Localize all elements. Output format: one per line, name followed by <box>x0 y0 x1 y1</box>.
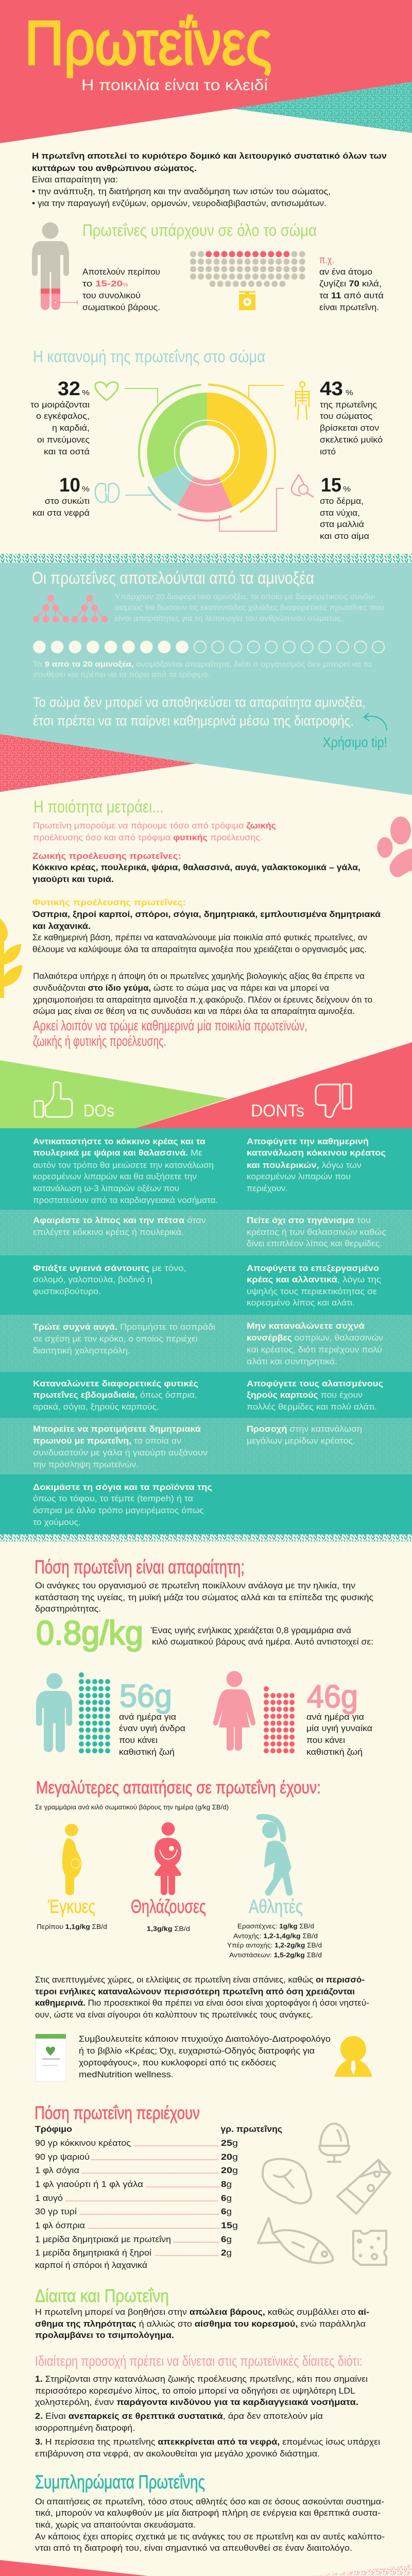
text: adult requirement: Ένας υγιής ενήλικας χρειάζεται 0,8 γραμμάρια ανά <box>150 1625 351 1635</box>
icon: nursing woman <box>154 1822 181 1895</box>
text: diet and protein: σθημα της πληρότητας ή αλλιώς στο αίσθημα του κορεσμού, ενώ παράλληλα <box>35 2319 366 2329</box>
stat: 15 percent: στα νύχια, <box>320 508 360 518</box>
text: advice: medNutrition wellness. <box>79 2070 174 2079</box>
tip rows: donts: κρέας και αλλαντικά , λόγω της <box>247 1275 381 1284</box>
tip rows: donts: και πουλερικών, λόγω των <box>247 1160 362 1170</box>
table: protein content: 6g <box>221 2207 232 2216</box>
text: essential amino acids: συνθέσει και πρέπει να τα πάρει από τα τρόφιμα. <box>33 670 210 679</box>
heading: how much protein: Πόση πρωτεΐνη είναι απαραίτητη; <box>35 1556 245 1578</box>
text: supplements: Αν κάποιος έχει απορίες σχετικά με τις ανάγκες του σε πρωτεΐνη και αν αυτές καλύπτο- <box>35 2532 385 2541</box>
stat: 15 percent: στα μαλλιά <box>320 519 364 529</box>
text: diet and protein: Η πρωτεΐνη μπορεί να βοηθήσει στην απώλεια βάρους, καθώς συμβάλλει στο αί- <box>35 2307 369 2317</box>
text: 20 amino acids: ασμούς θα δώσουν τις εκατοντάδες χιλιάδες διαφορετικές πρωτεΐνες που <box>115 603 384 612</box>
values: requirements: Ερασιτέχνες: 1g/kg ΣΒ/d <box>237 1922 314 1930</box>
text: healthy woman: μία υγιή γυναίκα <box>306 1723 372 1733</box>
stat: 10 percent: και στα νεφρά <box>32 508 90 518</box>
text: combining proteins: συνδυάζονται στο ίδιο γεύμα, ώστε το σώμα μας να πάρει και να μπορεί να <box>33 983 329 993</box>
tip rows: dos: όσπρια με άλλο τρόπο μαγειρέματος όπως <box>33 1505 204 1515</box>
stat: 43 percent: της πρωτεΐνης <box>320 400 377 410</box>
icon: man <box>36 1673 72 1752</box>
text: body share: του συνολικού <box>82 291 141 300</box>
text: protein sources: προέλευσης όσο και από τρόφιμα φυτικής προέλευσης. <box>33 833 263 842</box>
tip rows: donts: κορεσμένο λίπος και αλάτι. <box>247 1298 355 1308</box>
tip rows: dos: αρακά, σόγια, ξηρούς καρπούς. <box>33 1402 159 1412</box>
heading: supplements: Συμπληρώματα Πρωτεΐνης <box>35 2471 205 2493</box>
tip rows: donts <box>247 1137 386 1446</box>
heading: quality: Η ποιότητα μετράει... <box>33 797 164 816</box>
tip rows: dos: Δοκιμάστε τη σόγια και τα προϊόντα της <box>33 1482 212 1492</box>
tip rows: dos: πουλερικά με ψάρια και θαλασσινά. Με <box>33 1148 202 1158</box>
panel: amino acids <box>0 554 412 795</box>
table: protein content: 1 μερίδα δημητριακά ή ξηροί <box>35 2248 151 2258</box>
intro text <box>32 151 387 208</box>
table: protein content: 20g <box>221 2152 238 2162</box>
stat: 15 percent <box>320 474 369 541</box>
table: protein content: 1 φλ σόγια <box>35 2165 79 2175</box>
callout: variety <box>33 1018 307 1049</box>
stat: 43 percent: βρίσκεται στον <box>320 423 379 433</box>
subtitle: Η ποικιλία είναι το κλειδί <box>81 77 268 94</box>
stat: 43 percent: του σώματος <box>320 411 372 421</box>
table: protein content: 1 μερίδα δημητριακά με πρωτεΐνη <box>35 2234 171 2244</box>
text: animal proteins: γιαούρτι και τυριά. <box>32 874 114 884</box>
icon: book <box>36 2034 66 2081</box>
dot grid: 46 g <box>264 1686 295 1753</box>
callout: body cannot store: Το σώμα δεν μπορεί να αποθηκεύσει τα απαραίτητα αμινοξέα, <box>33 694 366 710</box>
text: plant proteins: και λαχανικά. <box>32 921 91 931</box>
text: protein needs: κατάσταση της υγείας, τη μυϊκή μάζα του σώματος αλλά και τα επίπεδα της φυσικής <box>35 1592 373 1602</box>
tip rows: donts: ξηρούς καρπούς που έχουν <box>247 1390 363 1400</box>
tip rows: dos: φυστικοβούτυρο. <box>33 1286 101 1296</box>
table: protein content: 8g <box>221 2179 232 2189</box>
stat: 43 percent: 43 <box>320 378 343 400</box>
icon: drop with magnifier <box>291 474 314 497</box>
text: essential amino acids <box>33 660 372 679</box>
table: protein content: 6g <box>221 2193 232 2203</box>
table: protein content: 90 γρ κόκκινου κρέατος <box>35 2138 131 2148</box>
text: example 70 kg: π.χ. <box>319 255 334 266</box>
text: combining proteins: χρησιμοποιήσει τα απαραίτητα αμινοξέα π.χ.φακόρυζο. Πλέον οι έρευνες δείχνουν ότι το <box>33 995 372 1005</box>
stat: 15 percent: % <box>343 485 351 494</box>
table: protein content: καρποί ή σπόροι ή λαχανικά <box>35 2260 147 2270</box>
tip rows: dos: όπως το τόφου, το τέμπε (tempeh) ή τα <box>33 1494 193 1503</box>
tip rows: donts: Αποφύγετε τους αλατισμένους <box>247 1379 383 1388</box>
table: protein content: 15g <box>221 2221 238 2230</box>
text: supplements: τικά, μπορούν να καλυφθούν με μία διατροφή πλήρη σε ενέργεια και θρεπτικά συστα- <box>35 2508 381 2518</box>
stat: 32 percent: 32 <box>58 378 80 400</box>
text: protein needs: Οι ανάγκες του οργανισμού σε πρωτεΐνη ποικίλλουν ανάλογα με την ηλικία, την <box>35 1581 355 1590</box>
tip rows: dos: σολομό, γαλοπούλα, βοδινό ή <box>33 1275 152 1284</box>
text: 20 amino acids: είναι απαραίτητες για τη λειτουργία του ανθρώπινου σώματος. <box>115 614 343 623</box>
title: Πρωτεΐνες <box>25 8 272 78</box>
stat: 32 percent: το μοιράζονται <box>30 400 90 410</box>
icon: amino acid trees <box>33 595 108 622</box>
icon: scale <box>239 291 255 310</box>
tip rows: dos: Τρώτε συχνά αυγά. Προτιμήστε το ασπράδι <box>33 1322 215 1332</box>
text: developed countries <box>35 1975 369 2020</box>
text: protein needs <box>35 1581 373 1614</box>
text: combining proteins: Παλαιότερα υπήρχε η άποψη ότι οι πρωτεΐνες χαμηλής βιολογικής αξίας θα έπρεπε να <box>33 971 365 981</box>
tip rows: donts: υψηλής τους περιεκτικότητας σε <box>247 1286 377 1296</box>
stat: 32 percent <box>30 378 90 456</box>
list: reasons: 2. Είναι ανεπαρκείς σε θρεπτικά συστατικά , άρα δεν αποτελούν μία <box>35 2411 323 2421</box>
tip rows: dos: διαιτητική χοληστερόλη. <box>33 1346 130 1355</box>
icon: cheese <box>353 2231 386 2265</box>
icon: heart <box>95 382 118 400</box>
tip rows: dos: Αντικαταστήστε το κόκκινο κρέας και τα <box>33 1137 206 1146</box>
text: example 70 kg: είναι πρωτεΐνη. <box>319 302 379 312</box>
text: plant proteins: Όσπρια, ξηροί καρποί, σπόροι, σόγια, δημητριακά, εμπλουτισμένα δημητριακά <box>32 909 381 919</box>
values: requirements: 1,3g/kg ΣΒ/d <box>147 1925 190 1933</box>
values: requirements: Αντιστάσεων: 1,5-2g/kg ΣΒ/d <box>229 1951 322 1959</box>
header banner <box>0 0 412 143</box>
text: adult requirement <box>150 1625 373 1647</box>
list: reasons: 3. Η περίσσεια της πρωτεΐνης απεκκρίνεται από τα νεφρά, επομένως ίσως υπάρχει <box>35 2437 380 2447</box>
values: requirements: Υπέρ αντοχής: 1,2-2g/kg ΣΒ/d <box>227 1941 322 1949</box>
tip rows: donts: δίνει επιπλέον λίπος και θερμίδες. <box>247 1239 382 1248</box>
donut chart: protein distribution <box>125 384 284 531</box>
text: supplements: νται από τη διατροφή του, είναι σημαντικό να απευθυνθεί σε έναν διαιτολόγο. <box>35 2543 352 2553</box>
tip rows: dos: την πρόσληψη πρωτεϊνών. <box>33 1460 139 1469</box>
big number: 46 g: 46g <box>307 1679 358 1715</box>
big number: 56 g: 56g <box>119 1679 172 1714</box>
dot grid: 56 g <box>79 1672 110 1753</box>
dot grid: 70 kg <box>190 251 305 287</box>
heading: distribution: Η κατανομή της πρωτεΐνης στο σώμα <box>33 347 265 366</box>
arrow: tip <box>364 713 387 731</box>
text: plant proteins <box>32 897 381 954</box>
label: nursing: Θηλάζουσες <box>131 1896 206 1917</box>
text: developed countries: τεροι ενήλικες καταναλώνουν περισσότερη πρωτεΐνη από όση χρειάζονται <box>35 1987 355 1996</box>
icon: milk carton <box>337 2160 390 2214</box>
stat: 32 percent: % <box>82 388 90 397</box>
icon: thumbs up <box>35 1082 72 1117</box>
stat: 10 percent <box>32 474 90 518</box>
table: protein content: Τρόφιμο <box>35 2124 72 2134</box>
text: animal proteins <box>32 851 360 884</box>
text: body share: το 15-20 % <box>82 279 128 289</box>
icon: fish <box>258 2218 333 2263</box>
text: supplements: τικά, χωρίς να απαιτούνται σκευάσματα. <box>35 2520 196 2530</box>
values: requirements <box>37 1922 322 1959</box>
tip rows: dos: συνδυαστούν με γάλα ή γιαούρτι αυξάνουν <box>33 1448 208 1458</box>
label: athletes: Αθλητές <box>249 1896 303 1917</box>
text: body share: σωματικού βάρους. <box>82 302 160 312</box>
text: plant proteins: Σε καθημερινή βάση, πρέπει να καταναλώνουμε μία ποικιλία από φυτικές πρωτεΐνες, αν <box>32 933 367 942</box>
text: healthy man: που κάνει <box>119 1735 158 1745</box>
stat: 10 percent: 10 <box>59 474 80 496</box>
tip rows: dos: Μπορείτε να προτιμήσετε δημητριακά <box>33 1424 201 1434</box>
text: body share: Αποτελούν περίπου <box>82 267 160 277</box>
text: diet and protein: προλαμβάνει το τσιμπολόγημα. <box>35 2330 174 2340</box>
icon: steak <box>263 2159 311 2204</box>
table: protein content: 90 γρ ψαριού <box>35 2152 90 2162</box>
icon: kidneys <box>95 483 119 502</box>
tip rows: donts: Αποφύγετε το επεξεργασμένο <box>247 1263 379 1273</box>
icons: protein foods <box>258 2124 390 2265</box>
text: combining proteins: σώμα μας είναι σε θέση να τις συνδυάσει και να πάρει όλα τα απαραίτητα αμινοξέα. <box>33 1006 355 1016</box>
stat: 32 percent: και τα οστά <box>44 447 90 456</box>
panel: dos and donts list <box>0 1128 412 1541</box>
tip rows: dos: πρωτεΐνες εβδομαδιαία, όπως όσπρια, <box>33 1390 197 1400</box>
list: reasons: επιβάρυνση στα νεφρά, αν ακολουθείται για μεγάλο χρονικό διάστημα. <box>35 2449 320 2459</box>
icon: woman <box>213 1671 255 1751</box>
tip rows: dos: Αφαιρέστε το λίπος και την πέτσα όταν <box>33 1215 206 1225</box>
callout: variety: ζωικής ή φυτικής προέλευσης. <box>33 1033 166 1049</box>
tip rows: dos: προστατεύουν από τα καρδιαγγειακά νοσήματα. <box>33 1195 218 1205</box>
callout: body cannot store <box>33 694 366 728</box>
circles: 9 of 20 essential <box>33 641 384 653</box>
tip rows: donts: κρέατος ή των θαλασσινών καθώς <box>247 1227 386 1237</box>
text: advice: Συμβουλευτείτε κάποιον πτυχιούχο Διαιτολόγο-Διατροφολόγο <box>79 2034 331 2044</box>
table: protein content: 1 φλ όσπρια <box>35 2221 85 2230</box>
tip rows: dos: κατανάλωση ω-3 λιπαρών οξέων που <box>33 1183 179 1193</box>
tip rows: dos: σε σχέση με τον κρόκο, ο οποίος περιέχει <box>33 1334 198 1344</box>
big number: 0.8 g per kg: 0.8g/kg <box>36 1614 143 1652</box>
table: protein content: γρ. πρωτεΐνης <box>220 2124 282 2134</box>
list: reasons: 1. Στηρίζονται στην κατανάλωση ζωικής προέλευσης πρωτεΐνης, κάτι που σημαίνει <box>35 2374 368 2384</box>
caption: units: Σε γραμμάρια ανά κιλό σωματικού βάρους την ημέρα (g/kg ΣΒ/d) <box>35 1804 229 1811</box>
text: 20 amino acids <box>115 592 384 623</box>
list: reasons <box>35 2374 380 2459</box>
text: developed countries: Στις ανεπτυγμένες χώρες, οι ελλείψεις σε πρωτεΐνη είναι σπάνιες, καθώς οι περισσό- <box>35 1975 365 1985</box>
list: reasons: χοληστερόλη, έναν παράγοντα κινδύνου για τα καρδιαγγειακά νοσήματα. <box>35 2397 358 2407</box>
stat: 43 percent: σκελετικό μυϊκό <box>320 435 383 445</box>
tip rows: donts: Αποφύγετε την καθημερινή <box>247 1137 369 1146</box>
stat: 15 percent: στο δέρμα, <box>320 496 364 506</box>
text: example 70 kg: ζυγίζει 70 κιλά, <box>319 279 382 289</box>
table: protein content: 6g <box>221 2234 232 2244</box>
text: protein needs: δραστηριότητας. <box>35 1604 101 1614</box>
tip rows: donts: αλάτι και συντηρητικά. <box>247 1357 337 1366</box>
heading: proteins in body: Πρωτεΐνες υπάρχουν σε όλο το σώμα <box>82 221 317 240</box>
text: supplements: Οι απαιτήσεις σε πρωτεΐνη, τόσο στους αθλητές όσο και σε όσους ασκούνται συστημα- <box>35 2497 384 2506</box>
text: healthy man: έναν υγιή άνδρα <box>119 1723 185 1733</box>
heading: amino acids: Οι πρωτεΐνες αποτελούνται από τα αμινοξέα <box>32 568 314 587</box>
text: example 70 kg <box>319 255 384 312</box>
text: adult requirement: κιλό σωματικού βάρους ανά ημέρα. Αυτό αντιστοιχεί σε: <box>152 1637 373 1647</box>
text: protein sources <box>33 821 276 842</box>
tip rows: donts: Μην καταναλώνετε συχνά <box>247 1321 365 1331</box>
stat: 10 percent: % <box>82 485 90 494</box>
table: protein content: 20g <box>221 2165 238 2175</box>
callout: variety: Αρκεί λοιπόν να τρώμε καθημερινά μία ποικιλία πρωτεϊνών, <box>33 1018 307 1033</box>
text: example 70 kg: αν ένα άτομο <box>319 267 372 277</box>
list: reasons: περισσότερο κορεσμένο λίπος, το οποίο μπορεί να οδηγήσει σε υψηλότερη LDL <box>35 2386 355 2396</box>
table: protein content: 25g <box>221 2138 238 2148</box>
stat: 15 percent: και στο αίμα <box>320 531 369 541</box>
tip rows: donts: μεγάλων μερίδων κρέατος. <box>247 1436 355 1446</box>
text: advice <box>79 2034 331 2079</box>
text: advice: χορτοφάγους», που κυκλοφορεί από τις εκδόσεις <box>79 2058 276 2067</box>
tip rows: dos: Καταναλώνετε διαφορετικές φυτικές <box>33 1379 198 1388</box>
text: healthy woman: που κάνει <box>306 1735 345 1745</box>
panel: quality <box>0 797 412 1049</box>
list: reasons: ισορροπημένη διατροφή. <box>35 2423 135 2433</box>
tip rows: donts: κατανάλωση κόκκινου κρέατος <box>247 1148 386 1158</box>
text: 20 amino acids: Υπάρχουν 20 διαφορετικά αμινοξέα, τα οποία με διαφορετικούς συνδυ- <box>115 592 376 601</box>
stat: 32 percent: οι πνεύμονες <box>37 435 90 445</box>
text: healthy woman <box>306 1712 372 1757</box>
text: example 70 kg: τα 11 από αυτά <box>319 291 384 300</box>
text: combining proteins <box>33 971 372 1016</box>
text: plant proteins: Φυτικής προέλευσης πρωτεΐνες: <box>32 897 186 907</box>
icon: thumbs down <box>316 1084 351 1117</box>
tip rows: donts: κονσέρβες οσπρίων, θαλασσινών <box>247 1333 383 1343</box>
text: healthy woman: ανά ημέρα για <box>306 1712 364 1722</box>
table: protein content <box>35 2124 282 2270</box>
text: advice: ή το βιβλίο «Κρέας; Όχι, ευχαριστώ-Οδηγός διατροφής για <box>79 2046 315 2056</box>
intro text: Είναι απαραίτητη για: <box>32 175 118 184</box>
stat: 43 percent: % <box>346 388 353 397</box>
tip rows: dos: κορεσμένων λιπαρών και θα αυξήσετε την <box>33 1172 197 1181</box>
tip rows: dos: πρωινού με πρωτεΐνη, τα οποία αν <box>33 1436 181 1446</box>
text: plant proteins: θέλουμε να καλύψουμε όλα τα απαραίτητα αμινοξέα που χρειάζεται ο οργανισμός μας. <box>32 944 367 954</box>
tip label: Χρήσιμο tip! <box>323 734 387 750</box>
tip rows: dos: αυτόν τον τρόπο θα μειώσετε την κατανάλωση <box>33 1160 214 1170</box>
label: pregnant: Έγκυες <box>47 1896 95 1917</box>
icon: egg in cup <box>319 2124 349 2162</box>
text: developed countries: ουν, ώστε να είναι σίγουροι ότι καλύπτουν τις πρωτεϊνικές τους ανάγκες. <box>35 2010 313 2020</box>
stat: 43 percent: ιστό <box>320 447 336 456</box>
text: essential amino acids: Τα 9 από τα 20 αμινοξέα, ονομάζονται απαραίτητα, διότι ο οργανισμός δεν μπορεί να τα <box>33 660 372 669</box>
tip rows: donts: Προσοχή στην κατανάλωση <box>247 1424 362 1434</box>
text: animal proteins: Κόκκινο κρέας, πουλερικά, ψάρια, θαλασσινά, αυγά, γαλακτοκομικά – γάλα, <box>32 862 360 872</box>
intro text: • για την παραγωγή ενζύμων, ορμονών, νευροδιαβιβαστών, αντισωμάτων. <box>32 198 327 208</box>
intro text: κυττάρων του ανθρώπινου σώματος. <box>32 163 197 173</box>
stat: 15 percent: 15 <box>321 474 341 496</box>
table: protein content: 2g <box>221 2248 232 2258</box>
values: requirements: Περίπου 1,1g/kg ΣΒ/d <box>37 1923 107 1930</box>
text: healthy man: ανά ημέρα για <box>119 1712 176 1722</box>
tip rows: donts: περιέχουν. <box>247 1183 288 1193</box>
table: protein content: 1 αυγό <box>35 2193 63 2203</box>
tip rows: donts: Πείτε όχι στο τηγάνισμα του <box>247 1215 371 1225</box>
tip rows: dos <box>33 1137 218 1527</box>
tip rows: donts: και κρέατος, διότι περιέχουν πολύ <box>247 1345 382 1354</box>
tip rows: donts: κορεσμένων λιπαρών που <box>247 1172 351 1181</box>
intro text: • την ανάπτυξη, τη διατήρηση και την αναδόμηση των ιστών του σώματος, <box>32 187 331 196</box>
text: protein sources: Πρωτεΐνη μπορούμε να πάρουμε τόσο από τρόφιμα ζωικής <box>33 821 276 831</box>
tip rows: donts: πολλές θερμίδες και πολύ αλάτι. <box>247 1402 377 1412</box>
heading: diet and protein: Δίαιτα και Πρωτεΐνη <box>35 2286 169 2306</box>
text: supplements <box>35 2497 385 2553</box>
stat: 10 percent: στο συκώτι <box>45 496 90 506</box>
table: protein content: 30 γρ τυρί <box>35 2207 77 2216</box>
icon: dietitian <box>334 2036 372 2077</box>
icon: wheat <box>0 919 22 998</box>
text: animal proteins: Ζωικής προέλευσης πρωτεΐνες: <box>32 851 181 861</box>
heading: protein content: Πόση πρωτεΐνη περιέχουν <box>35 2103 200 2123</box>
table: protein content: 1 φλ γιαούρτι ή 1 φλ γάλα <box>35 2179 143 2189</box>
stat: 32 percent: ο εγκέφαλος, <box>36 411 90 421</box>
text: healthy man <box>119 1712 185 1757</box>
icon: pregnant woman <box>62 1824 81 1895</box>
panel: footer <box>0 2560 412 2576</box>
tip rows: dos: το χούμους. <box>33 1517 81 1527</box>
intro text: Η πρωτεΐνη αποτελεί το κυριότερο δομικό και λειτουργικό συστατικό όλων των <box>32 151 387 161</box>
callout: body cannot store: έτσι πρέπει να τα παίρνει καθημερινά μέσω της διατροφής. <box>33 713 354 728</box>
label: donts: DONTs <box>251 1101 304 1120</box>
heading: greater requirements: Μεγαλύτερες απαιτήσεις σε πρωτεΐνη έχουν: <box>36 1778 321 1798</box>
icon: paw <box>377 817 412 877</box>
text: healthy woman: καθιστική ζωή <box>306 1747 363 1757</box>
label: dos: DOs <box>83 1101 114 1120</box>
text: healthy man: καθιστική ζωή <box>119 1747 175 1757</box>
icon: skeleton <box>296 382 309 420</box>
stat: 32 percent: η καρδιά, <box>52 423 90 433</box>
values: requirements: Αντοχής: 1,2-1,4g/kg ΣΒ/d <box>233 1932 318 1940</box>
text: developed countries: καθημερινά. Πιο προσεκτικοί θα πρέπει να είναι όσοι είναι χορτοφάγοι ή όσοι νηστεύ- <box>35 1998 369 2008</box>
text: diet and protein <box>35 2307 369 2340</box>
icon: athlete <box>259 1817 291 1892</box>
tip rows: dos: επιλέγετε κόκκινο κρέας ή πουλερικά. <box>33 1227 184 1237</box>
stat: 43 percent <box>320 378 383 456</box>
text: body share <box>82 267 160 312</box>
icon: body with protein share <box>32 223 77 310</box>
tip rows: dos: Φτιάξτε υγιεινά σάντουιτς με τόνο, <box>33 1263 186 1273</box>
panel: dos and donts header <box>0 1042 412 1128</box>
